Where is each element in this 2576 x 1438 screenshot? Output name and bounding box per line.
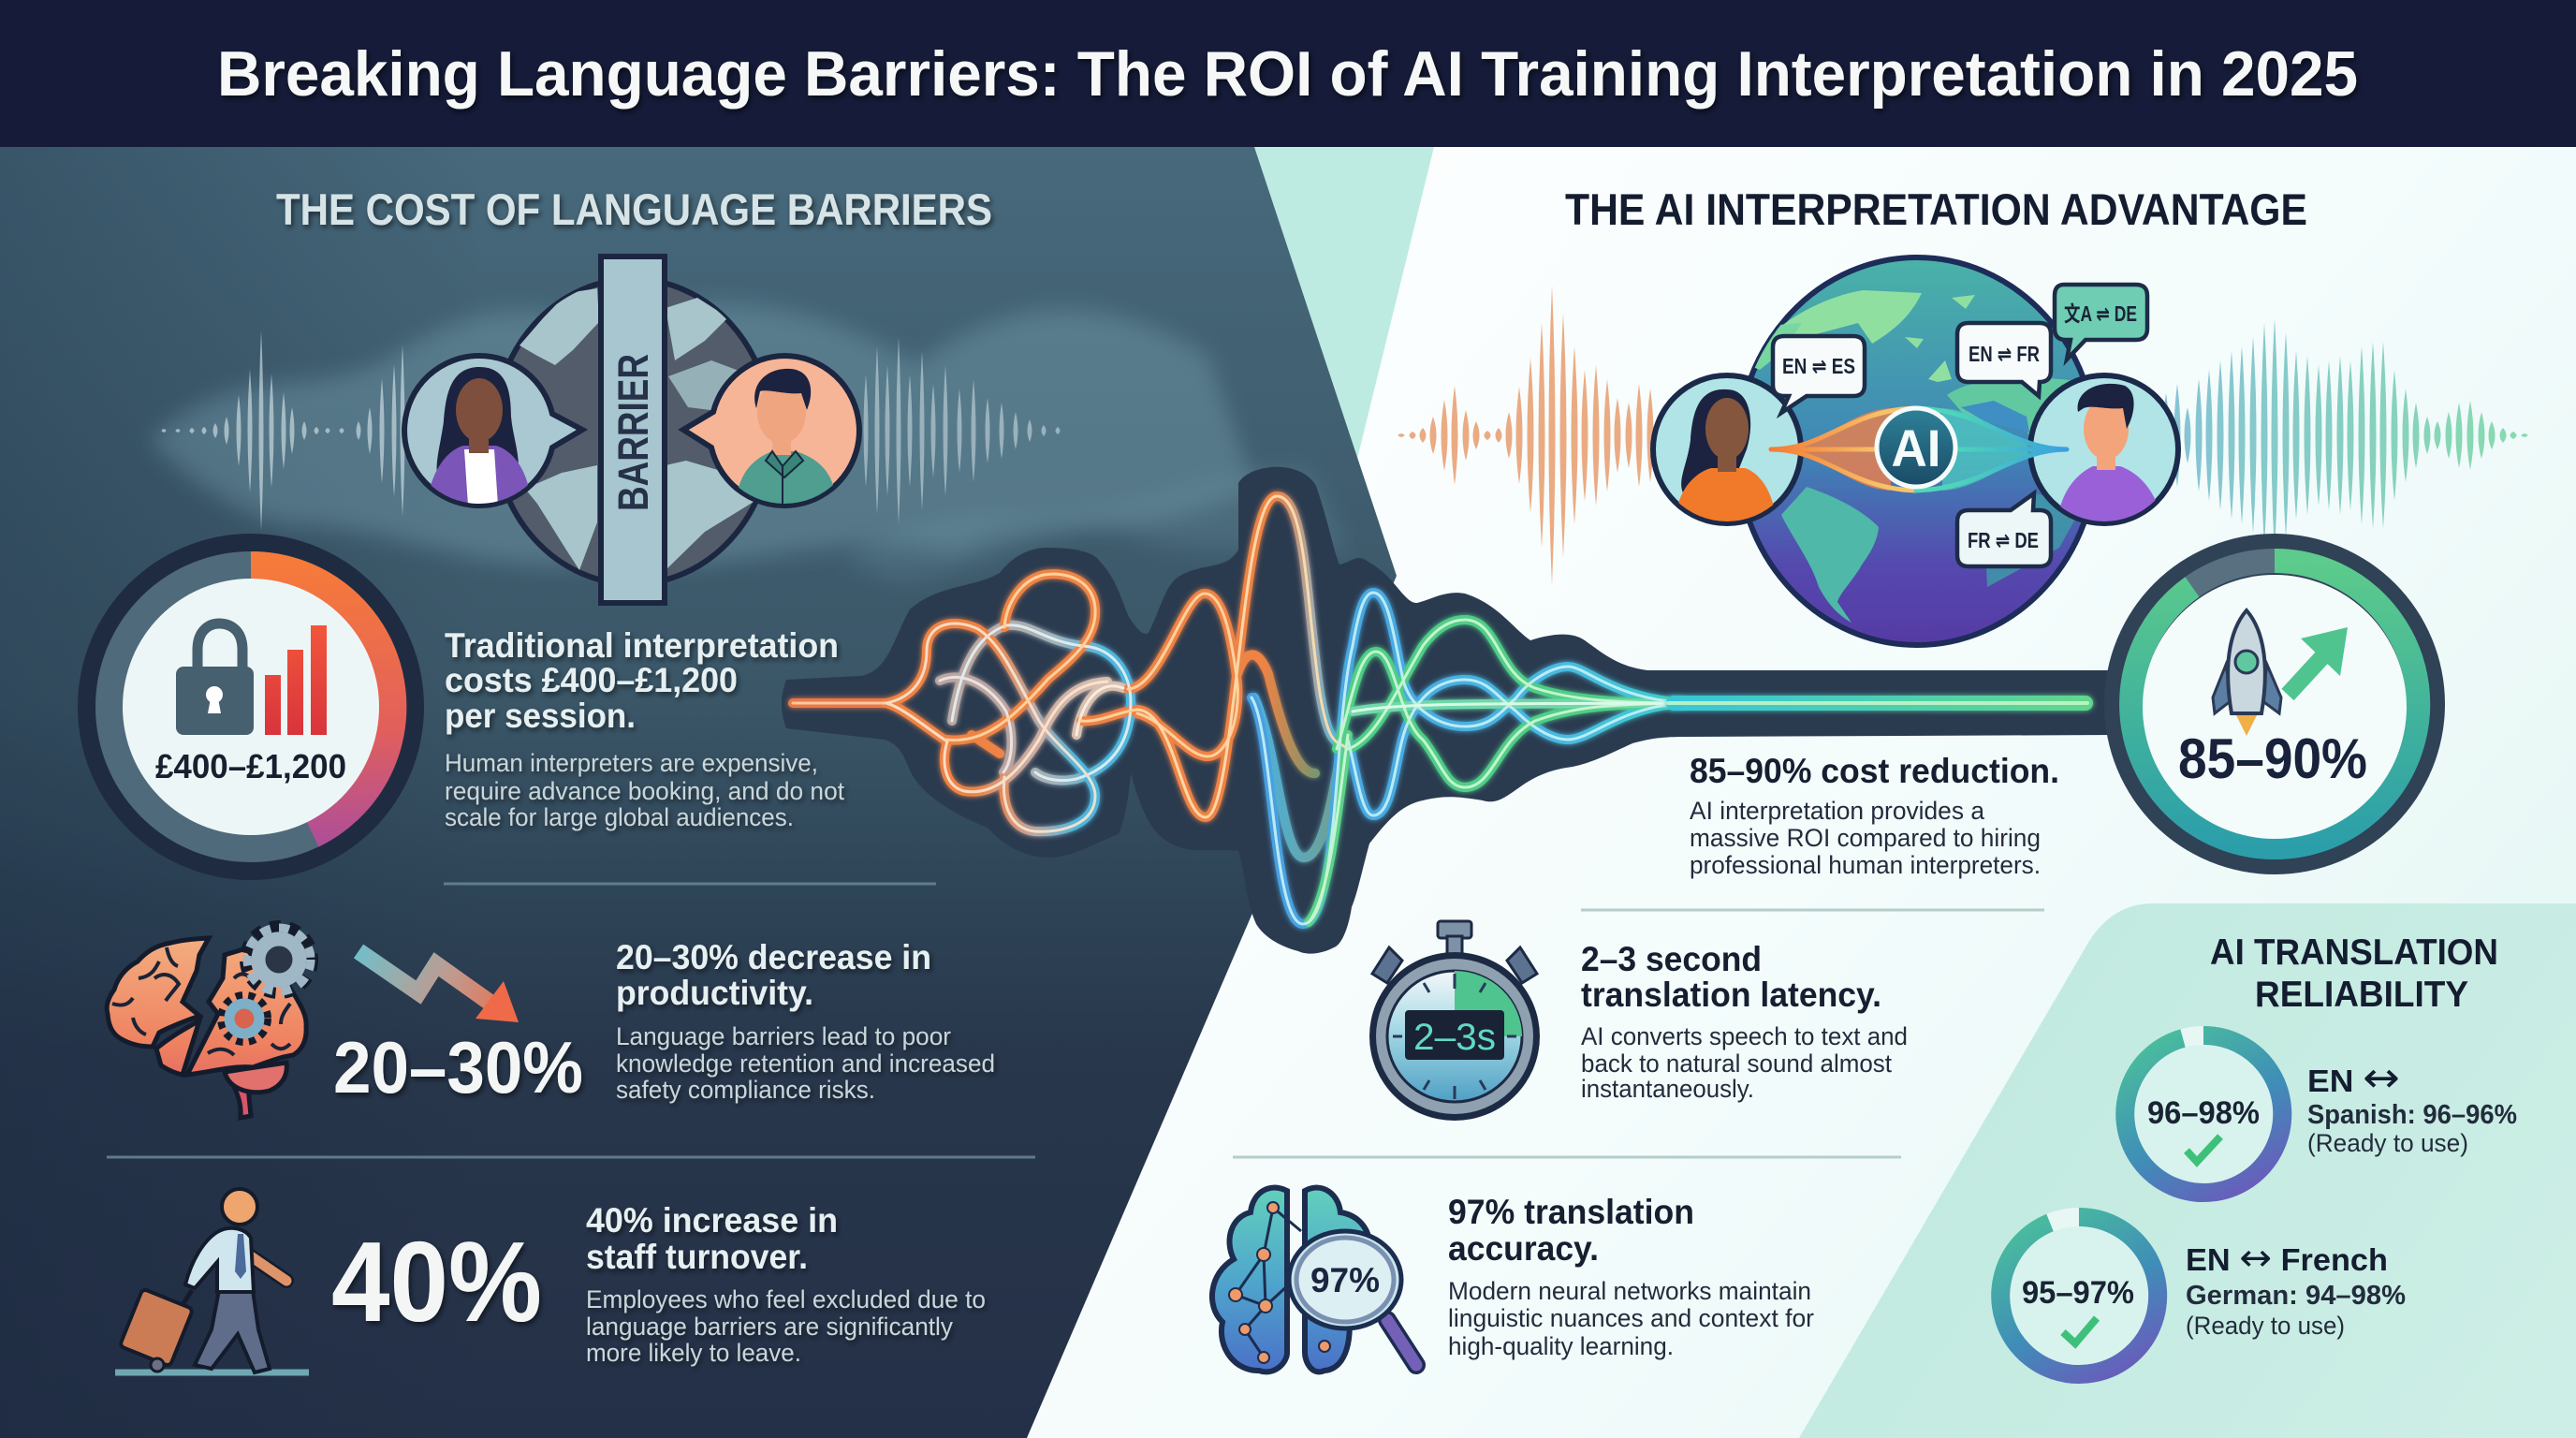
AI badge: AI bbox=[1891, 418, 1941, 477]
speaker: man bbox=[683, 356, 859, 506]
left dark panel background bbox=[0, 147, 1397, 1438]
bubble: language DE bbox=[2055, 285, 2147, 360]
stat value: £400–£1,200 bbox=[155, 747, 346, 785]
bubble: FR-DE bbox=[1957, 493, 2051, 566]
AI globe illustration bbox=[1653, 257, 2178, 645]
barrier label: BARRIER bbox=[609, 354, 657, 511]
label: French German reliability: EN ↔ French bbox=[2186, 1237, 2388, 1280]
text block: latency: back to natural sound almost bbox=[1581, 1049, 1892, 1078]
text block: interpretation cost: require advance booking, and do not bbox=[445, 777, 844, 805]
text block: productivity: 20–30% decrease in bbox=[616, 938, 931, 976]
AI badge bbox=[1877, 408, 1955, 487]
heading: reliability: AI TRANSLATION bbox=[2210, 932, 2498, 973]
waveform: muted right bbox=[863, 337, 1060, 524]
icon: employee leaving with suitcase bbox=[115, 1189, 309, 1372]
ribbon: clear beam bbox=[1666, 696, 2093, 711]
speaker: woman bbox=[1653, 375, 1801, 524]
text block: staff turnover: Employees who feel excluded due to bbox=[586, 1285, 986, 1313]
icon: check bbox=[2063, 1318, 2097, 1343]
ring: French German reliability: 95–97% bbox=[2022, 1275, 2134, 1311]
text block: interpretation cost: per session. bbox=[445, 697, 636, 735]
icon: padlock bbox=[176, 624, 254, 735]
label: French German reliability: German: 94–98% bbox=[2186, 1281, 2406, 1311]
text block: latency: 2–3 second bbox=[1581, 940, 1762, 978]
header bar bbox=[0, 0, 2576, 147]
label: French German reliability: (Ready to use) bbox=[2186, 1312, 2345, 1340]
text block: accuracy: linguistic nuances and context for bbox=[1448, 1304, 1814, 1332]
text block: latency: instantaneously. bbox=[1581, 1075, 1754, 1103]
icon: rising bars bbox=[265, 625, 327, 735]
icon: fractured brain with gears bbox=[107, 926, 313, 1118]
fog ridge lower bbox=[842, 468, 1348, 580]
barrier illustration bbox=[404, 257, 859, 603]
text block: interpretation cost: Human interpreters are expensive, bbox=[445, 749, 818, 777]
ribbon: knot glow strokes bbox=[793, 496, 1685, 924]
bubble: EN-ES: EN ⇌ ES bbox=[1782, 354, 1855, 378]
neural network nodes bbox=[1229, 1202, 1330, 1363]
mint wedge top bbox=[1245, 147, 1434, 459]
label: Spanish reliability: (Ready to use) bbox=[2307, 1129, 2468, 1157]
translation beams bbox=[1769, 408, 2069, 491]
globe: connected bbox=[1736, 257, 2101, 645]
stat: 40%: 40% bbox=[331, 1218, 542, 1345]
text block: interpretation cost bbox=[445, 626, 844, 831]
text block: cost reduction: 85–90% cost reduction. bbox=[1690, 752, 2059, 790]
title: Breaking Language Barriers: The ROI of AI Training Interpretation in 2025 bbox=[217, 38, 2358, 110]
text block: accuracy bbox=[1448, 1193, 1814, 1360]
waveform: orange bbox=[1398, 286, 1653, 585]
text block: interpretation cost: scale for large global audiences. bbox=[445, 803, 794, 831]
icon: growth arrow bbox=[2288, 627, 2348, 695]
bubble: language DE: 文A ⇌ DE bbox=[2064, 301, 2137, 326]
text block: latency: AI converts speech to text and bbox=[1581, 1022, 1908, 1050]
text block: accuracy: high-quality learning. bbox=[1448, 1332, 1674, 1360]
text block: productivity: Language barriers lead to poor bbox=[616, 1022, 951, 1050]
ribbon: tangled lines to clear wave bbox=[793, 496, 1685, 924]
label: French German reliability bbox=[2186, 1237, 2406, 1340]
waveform: teal green bbox=[2162, 318, 2527, 552]
text block: accuracy: Modern neural networks maintain bbox=[1448, 1277, 1811, 1305]
label: Spanish reliability bbox=[2307, 1054, 2517, 1157]
LCD readout: 2–3s bbox=[1413, 1017, 1496, 1058]
text block: staff turnover: language barriers are significantly bbox=[586, 1313, 953, 1341]
text block: staff turnover bbox=[586, 1201, 986, 1367]
bubble: EN-ES bbox=[1773, 336, 1865, 413]
left panel vignette bbox=[0, 147, 487, 1438]
bubble: EN-FR bbox=[1957, 323, 2051, 396]
text block: cost reduction: massive ROI compared to hiring bbox=[1690, 824, 2041, 852]
magnifier lens: 97% bbox=[1310, 1261, 1380, 1299]
stat ring: cost reduction bbox=[2104, 534, 2445, 874]
text block: latency: translation latency. bbox=[1581, 976, 1881, 1014]
text block: staff turnover: 40% increase in bbox=[586, 1201, 838, 1240]
stat: 20-30%: 20–30% bbox=[333, 1026, 583, 1108]
stat ring: interpretation cost bbox=[78, 534, 424, 880]
heading: AI interpretation advantage: THE AI INTERPRETATION ADVANTAGE bbox=[1565, 184, 2307, 234]
text block: staff turnover: staff turnover. bbox=[586, 1238, 808, 1276]
icon: rocket bbox=[2213, 610, 2281, 736]
barrier bar bbox=[601, 257, 665, 603]
bubble: EN-FR: EN ⇌ FR bbox=[1969, 342, 2040, 366]
text block: accuracy: accuracy. bbox=[1448, 1229, 1599, 1268]
text block: accuracy: 97% translation bbox=[1448, 1193, 1694, 1231]
mint reliability panel background bbox=[1799, 903, 2576, 1438]
bubble: FR-DE: FR ⇌ DE bbox=[1968, 528, 2039, 552]
speaker: woman bbox=[404, 356, 582, 506]
stat value: 85–90% bbox=[2178, 727, 2367, 790]
gear: upper bbox=[245, 926, 313, 993]
ring: French German reliability bbox=[2000, 1217, 2158, 1374]
text block: productivity: productivity. bbox=[616, 974, 813, 1012]
waveform: muted left bbox=[161, 330, 404, 531]
label: Spanish reliability: EN ↔ bbox=[2307, 1054, 2400, 1102]
ribbon: knot highlight core bbox=[793, 496, 1685, 924]
fog waves behind barrier illustration bbox=[150, 304, 1254, 565]
text block: cost reduction bbox=[1690, 752, 2059, 879]
speaker: man bbox=[2030, 375, 2178, 524]
text block: productivity: knowledge retention and increased bbox=[616, 1049, 995, 1078]
LCD readout bbox=[1405, 1010, 1504, 1060]
text block: interpretation cost: costs £400–£1,200 bbox=[445, 661, 738, 699]
heading: reliability bbox=[2210, 932, 2498, 1015]
text block: staff turnover: more likely to leave. bbox=[586, 1339, 801, 1367]
magnifier lens bbox=[1289, 1231, 1401, 1328]
heading: reliability: RELIABILITY bbox=[2255, 975, 2468, 1015]
icon: neural brain with magnifier bbox=[1212, 1188, 1416, 1372]
text block: productivity: safety compliance risks. bbox=[616, 1076, 875, 1104]
text block: latency bbox=[1581, 940, 1908, 1103]
ring: Spanish reliability: 96–98% bbox=[2147, 1095, 2260, 1131]
ribbon backdrop bbox=[782, 467, 2115, 954]
label: Spanish reliability: Spanish: 96–96% bbox=[2307, 1100, 2517, 1130]
icon: check bbox=[2187, 1137, 2220, 1162]
text block: cost reduction: AI interpretation provides a bbox=[1690, 797, 1985, 825]
text block: interpretation cost: Traditional interpretation bbox=[445, 626, 839, 665]
icon: falling arrow bbox=[359, 951, 519, 1022]
icon: stopwatch bbox=[1369, 921, 1540, 1121]
globe: dimmed bbox=[507, 281, 758, 582]
text block: productivity bbox=[616, 938, 995, 1104]
gear: lower bbox=[222, 996, 267, 1041]
text block: cost reduction: professional human interpreters. bbox=[1690, 851, 2041, 879]
ring: Spanish reliability bbox=[2125, 1035, 2282, 1193]
heading: cost of language barriers: THE COST OF LANGUAGE BARRIERS bbox=[276, 184, 992, 234]
